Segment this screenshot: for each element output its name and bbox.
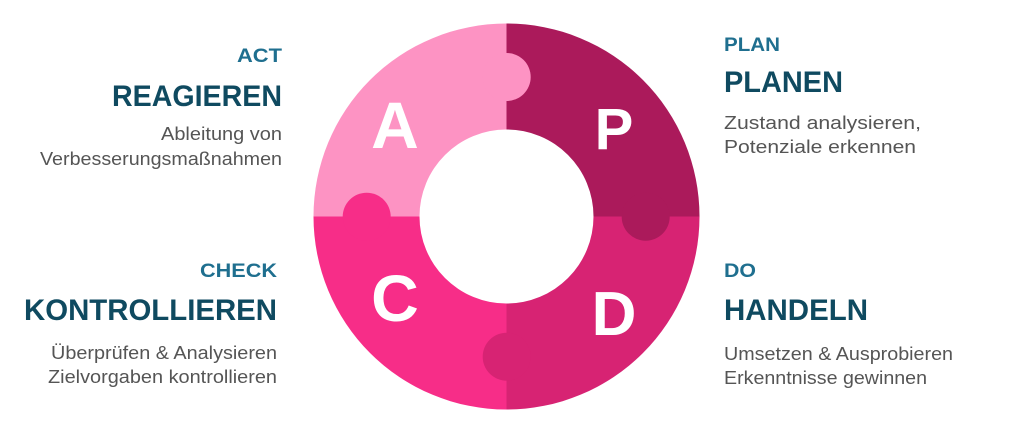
segment: D: [506, 216, 700, 410]
text block: CHECK: [24, 261, 277, 387]
segment: C: [314, 216, 506, 410]
segment: A: [314, 24, 506, 216]
knob: P: [622, 193, 670, 241]
text block: DO: DO: [724, 261, 756, 282]
text block: PLAN: PLANEN: [724, 66, 843, 99]
text block: ACT: ACT: [237, 46, 282, 67]
text block: DO: Erkenntnisse gewinnen: [724, 368, 927, 388]
text block: PLAN: Potenziale erkennen: [724, 137, 916, 157]
text block: ACT: Verbesserungsmaßnahmen: [40, 149, 282, 169]
text block: PLAN: PLAN: [724, 35, 780, 56]
text block: PLAN: [724, 35, 921, 157]
text block: CHECK: Zielvorgaben kontrollieren: [48, 367, 277, 387]
letter C: C: [371, 261, 419, 335]
knob: D: [483, 333, 531, 381]
text block: ACT: REAGIEREN: [112, 80, 282, 113]
letter P: P: [595, 97, 633, 162]
text block: DO: HANDELN: [724, 294, 868, 327]
text block: CHECK: KONTROLLIEREN: [24, 294, 277, 327]
text block: CHECK: CHECK: [200, 261, 277, 282]
knob: C: [343, 193, 391, 241]
letter D: D: [592, 280, 636, 349]
text block: DO: [724, 261, 953, 388]
text block: PLAN: Zustand analysieren,: [724, 113, 921, 133]
letter A: A: [371, 88, 419, 162]
PDCA puzzle ring: [314, 24, 700, 410]
segment: P: [506, 24, 700, 216]
text block: ACT: [40, 46, 282, 169]
text block: DO: Umsetzen & Ausprobieren: [724, 344, 953, 364]
knob: A: [483, 53, 531, 101]
text block: ACT: Ableitung von: [161, 124, 282, 144]
text block: CHECK: Überprüfen & Analysieren: [51, 343, 277, 363]
